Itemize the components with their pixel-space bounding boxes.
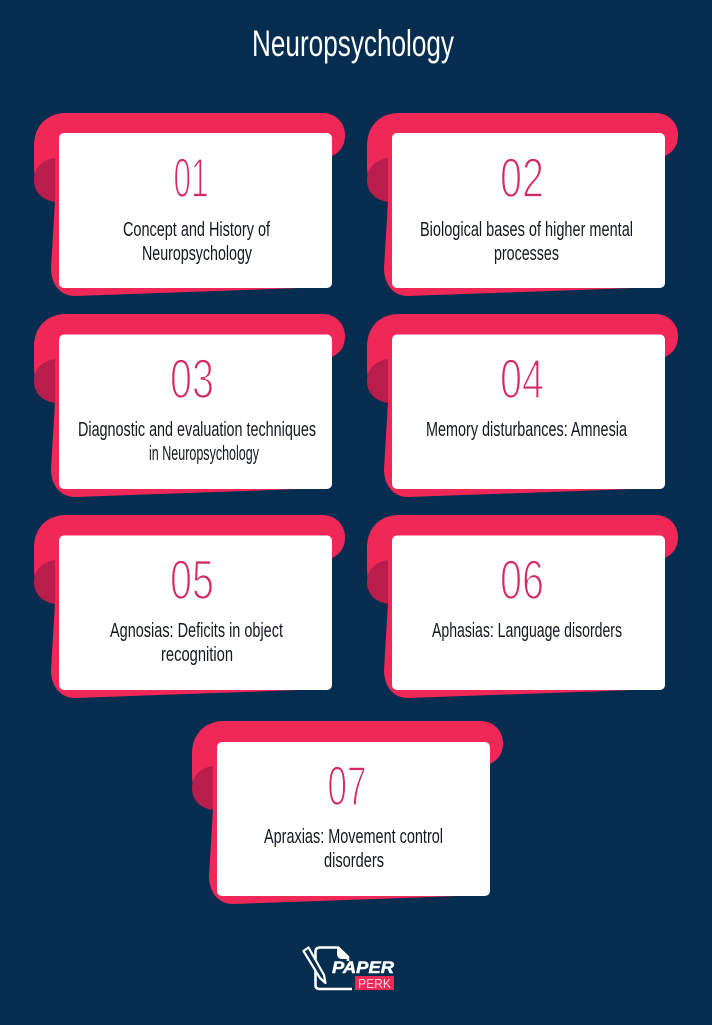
card 04: Memory disturbances: Amnesia — [426, 419, 628, 441]
card 06: Aphasias: Language disorders — [432, 620, 622, 642]
card 06: 06 — [500, 548, 544, 611]
card 04 — [367, 314, 678, 497]
card 01: Concept and History of — [123, 219, 270, 241]
logo word: PERK: PERK — [358, 977, 392, 991]
card 05 — [34, 515, 345, 698]
card 03: in Neuropsychology — [149, 443, 259, 465]
card 02: Biological bases of higher mental — [420, 219, 633, 241]
card 01: Neuropsychology — [142, 243, 252, 265]
card 02: processes — [494, 243, 559, 265]
card 07: disorders — [324, 850, 384, 872]
title: Neuropsychology — [252, 23, 454, 64]
card 03 — [34, 314, 345, 497]
card 07 — [192, 721, 503, 904]
card 03: 03 — [170, 347, 214, 410]
card 01 — [34, 113, 345, 296]
card 05: Agnosias: Deficits in object — [110, 620, 283, 642]
logo: Paper Perk — [304, 948, 394, 991]
card 07: Apraxias: Movement control — [264, 826, 443, 848]
card 02: 02 — [500, 146, 544, 209]
card 05: recognition — [161, 644, 233, 666]
card 01: 01 — [174, 146, 208, 209]
icon: page fold — [337, 948, 349, 959]
card 04: 04 — [500, 347, 544, 410]
card 05: 05 — [170, 548, 214, 611]
icon: page outline — [316, 948, 352, 989]
card 07: 07 — [328, 754, 366, 817]
card 02 — [367, 113, 678, 296]
icon: pencil — [304, 948, 326, 983]
logo word: PAPER: PAPER — [332, 959, 394, 977]
card 03: Diagnostic and evaluation techniques — [78, 419, 316, 441]
card 06 — [367, 515, 678, 698]
